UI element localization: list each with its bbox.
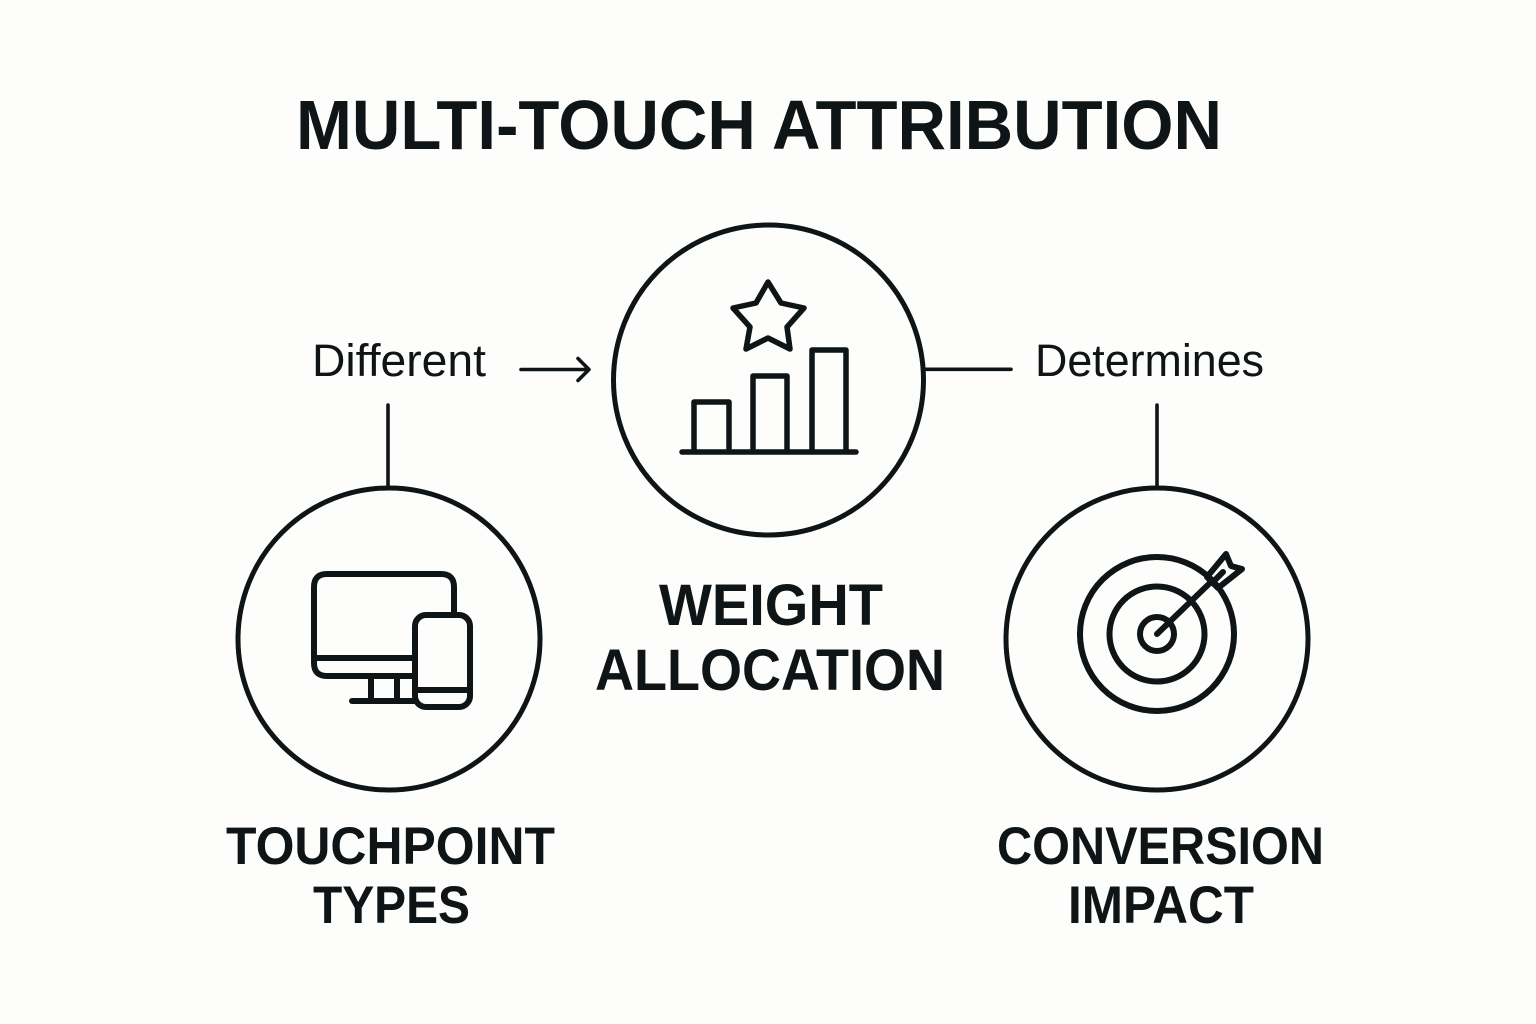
heading: weight allocation: ALLOCATION bbox=[595, 638, 945, 703]
heading: weight allocation: WEIGHT bbox=[659, 573, 883, 638]
circle: conversion impact bbox=[1006, 488, 1308, 790]
connector: weight allocation to determines bbox=[926, 367, 1011, 371]
heading: conversion impact: CONVERSION bbox=[997, 817, 1324, 876]
circle: touchpoint types bbox=[238, 488, 540, 790]
icon: star above bar chart bbox=[682, 282, 856, 452]
node: weight allocation bbox=[595, 225, 945, 703]
monitor bbox=[314, 574, 454, 701]
label: Different: Different bbox=[312, 335, 486, 386]
node: touchpoint types bbox=[226, 488, 555, 935]
connector: different to touchpoint types bbox=[386, 405, 390, 488]
icon: target with arrow bbox=[1080, 554, 1242, 711]
star bbox=[733, 282, 804, 349]
node: conversion impact bbox=[997, 488, 1324, 935]
phone bbox=[415, 615, 470, 707]
title: MULTI-TOUCH ATTRIBUTION bbox=[296, 86, 1222, 164]
circle: weight allocation bbox=[614, 225, 924, 535]
arrow: different to weight allocation bbox=[521, 358, 589, 380]
label: Determines: Determines bbox=[1035, 335, 1264, 386]
heading: touchpoint types: TOUCHPOINT bbox=[226, 817, 555, 876]
heading: conversion impact: IMPACT bbox=[1068, 876, 1254, 935]
heading: touchpoint types: TYPES bbox=[313, 876, 470, 935]
connector: determines to conversion impact bbox=[1155, 405, 1159, 488]
icon: desktop monitor and phone bbox=[314, 574, 470, 707]
dart bbox=[1157, 554, 1242, 634]
target rings bbox=[1080, 557, 1234, 711]
bars bbox=[682, 350, 856, 452]
